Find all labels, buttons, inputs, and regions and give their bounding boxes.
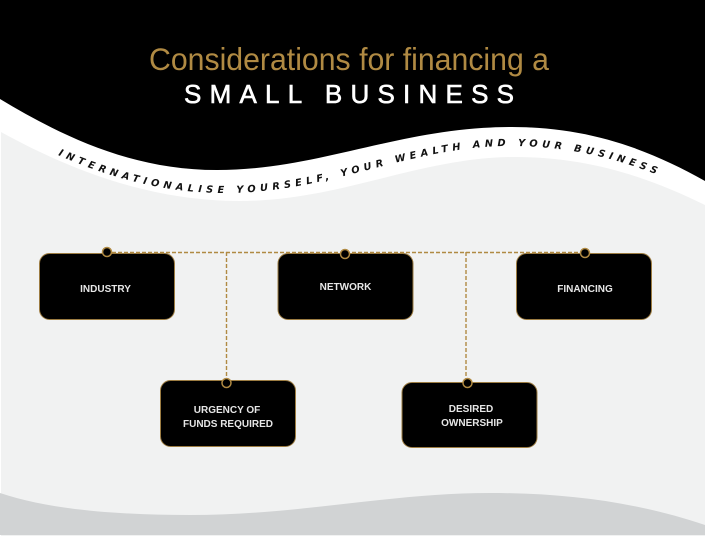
title line two: SMALL BUSINESS <box>184 79 514 109</box>
title line one: Considerations for financing a <box>149 41 549 77</box>
card: network <box>278 250 413 320</box>
card: desired ownership: DESIRED <box>449 404 493 415</box>
infographic canvas: INTERNATIONALISE YOURSELF, YOUR WEALTH AND YOUR BUSINESS <box>58 138 658 193</box>
card: urgency of funds required <box>160 378 296 446</box>
card: desired ownership: OWNERSHIP <box>441 418 503 429</box>
light grey background panel <box>1 132 705 536</box>
card: industry: INDUSTRY <box>80 284 131 295</box>
card: urgency of funds required: URGENCY OF <box>194 405 260 416</box>
card: desired ownership <box>402 378 537 448</box>
card: network: NETWORK <box>320 282 372 293</box>
card: financing <box>516 248 652 320</box>
black header wave <box>0 0 705 181</box>
card: urgency of funds required: FUNDS REQUIRED <box>183 419 273 430</box>
card: financing: FINANCING <box>557 284 613 295</box>
card: industry <box>40 248 174 320</box>
dashed connectors <box>112 252 580 380</box>
bottom grey wave <box>0 493 705 535</box>
curved tagline <box>58 146 668 193</box>
